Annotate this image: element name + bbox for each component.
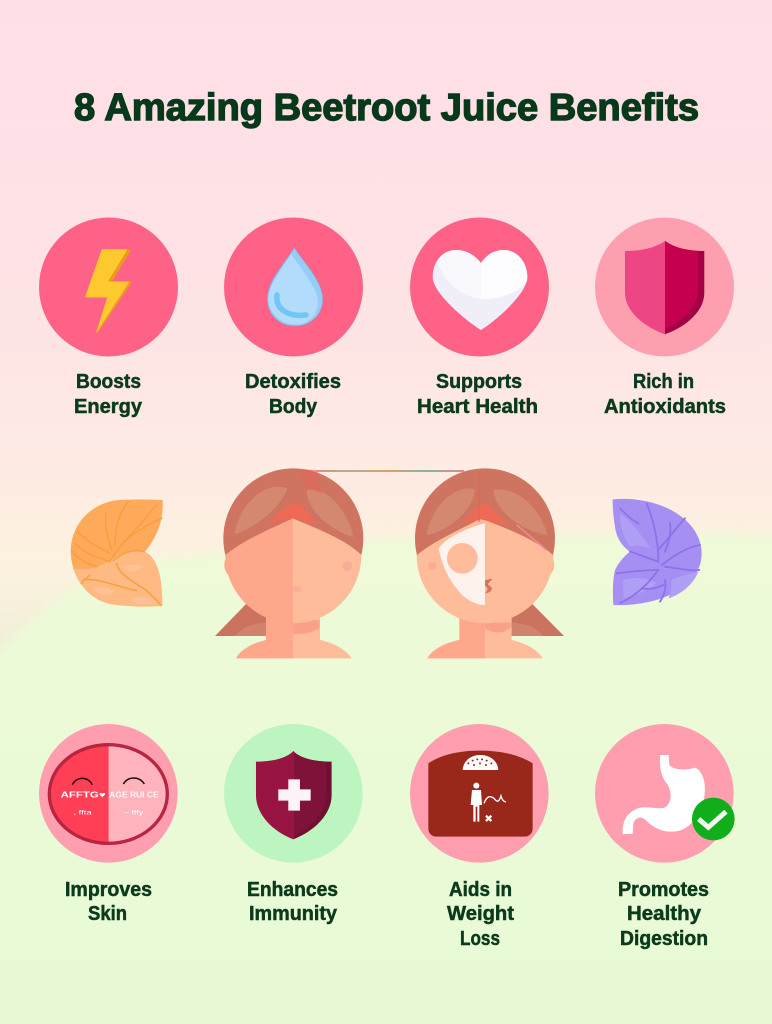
label: Supports xyxy=(436,371,522,393)
icon: lightning bolt xyxy=(39,218,178,356)
icon: split face: AFFTG♥ xyxy=(61,791,106,800)
panel: supports heart health xyxy=(410,218,549,418)
ponytail xyxy=(215,602,268,636)
icon: stomach with check xyxy=(595,724,735,863)
connecting line between faces xyxy=(316,470,464,472)
panel: promotes healthy digestion xyxy=(595,724,735,950)
illustration: right face xyxy=(415,468,564,658)
label: Healthy xyxy=(627,903,702,925)
label: Weight xyxy=(447,903,514,925)
panel: rich in antioxidants xyxy=(595,218,734,418)
icon: orange leaf xyxy=(71,499,163,606)
label: Digestion xyxy=(620,928,708,950)
label: Antioxidants xyxy=(604,396,726,418)
icon: weighing scale xyxy=(410,724,549,863)
label: Immunity xyxy=(249,903,338,925)
panel: boosts energy xyxy=(39,218,178,418)
label xyxy=(417,371,538,418)
label: Body xyxy=(269,396,318,418)
face xyxy=(417,487,553,623)
icon: split face xyxy=(39,724,178,863)
icon: split face: AGE RUI CE xyxy=(109,791,159,800)
label xyxy=(245,371,341,418)
ears xyxy=(224,552,246,578)
icon: purple leaf xyxy=(613,499,702,605)
face xyxy=(225,493,293,623)
icon: split face: – fffy xyxy=(124,811,143,817)
icon: split face: , ffta xyxy=(73,811,93,817)
white eye patch xyxy=(439,523,485,605)
icon: shield with cross xyxy=(224,724,363,863)
label xyxy=(604,371,726,418)
label: Aids in xyxy=(449,879,512,901)
label xyxy=(65,879,152,925)
title: 8 Amazing Beetroot Juice Benefits xyxy=(74,87,699,129)
neck and shoulders xyxy=(427,610,485,658)
label: Heart Health xyxy=(417,396,538,418)
icon: water drop xyxy=(224,218,363,356)
illustration: left face xyxy=(215,468,363,658)
label: Detoxifies xyxy=(245,371,341,393)
label: Promotes xyxy=(618,879,709,901)
label: Improves xyxy=(65,879,152,901)
label: Skin xyxy=(88,903,127,925)
hair xyxy=(223,468,363,555)
panel: detoxifies body xyxy=(224,218,363,418)
label xyxy=(247,879,338,925)
lips xyxy=(485,579,492,593)
neck and shoulders xyxy=(236,610,293,658)
icon: heart xyxy=(410,218,549,356)
label: Loss xyxy=(460,928,500,950)
label: Energy xyxy=(74,396,143,418)
label: Enhances xyxy=(247,879,338,901)
label xyxy=(618,879,709,950)
hair xyxy=(415,468,555,555)
panel: aids in weight loss xyxy=(410,724,549,950)
ears xyxy=(532,553,554,577)
icon: shield xyxy=(595,218,734,356)
label: Boosts xyxy=(76,371,141,393)
panel: enhances immunity xyxy=(224,724,363,925)
label xyxy=(74,371,143,418)
panel: improves skin xyxy=(39,724,178,925)
label xyxy=(447,879,514,950)
ponytail xyxy=(511,602,564,636)
label: Rich in xyxy=(633,371,694,393)
